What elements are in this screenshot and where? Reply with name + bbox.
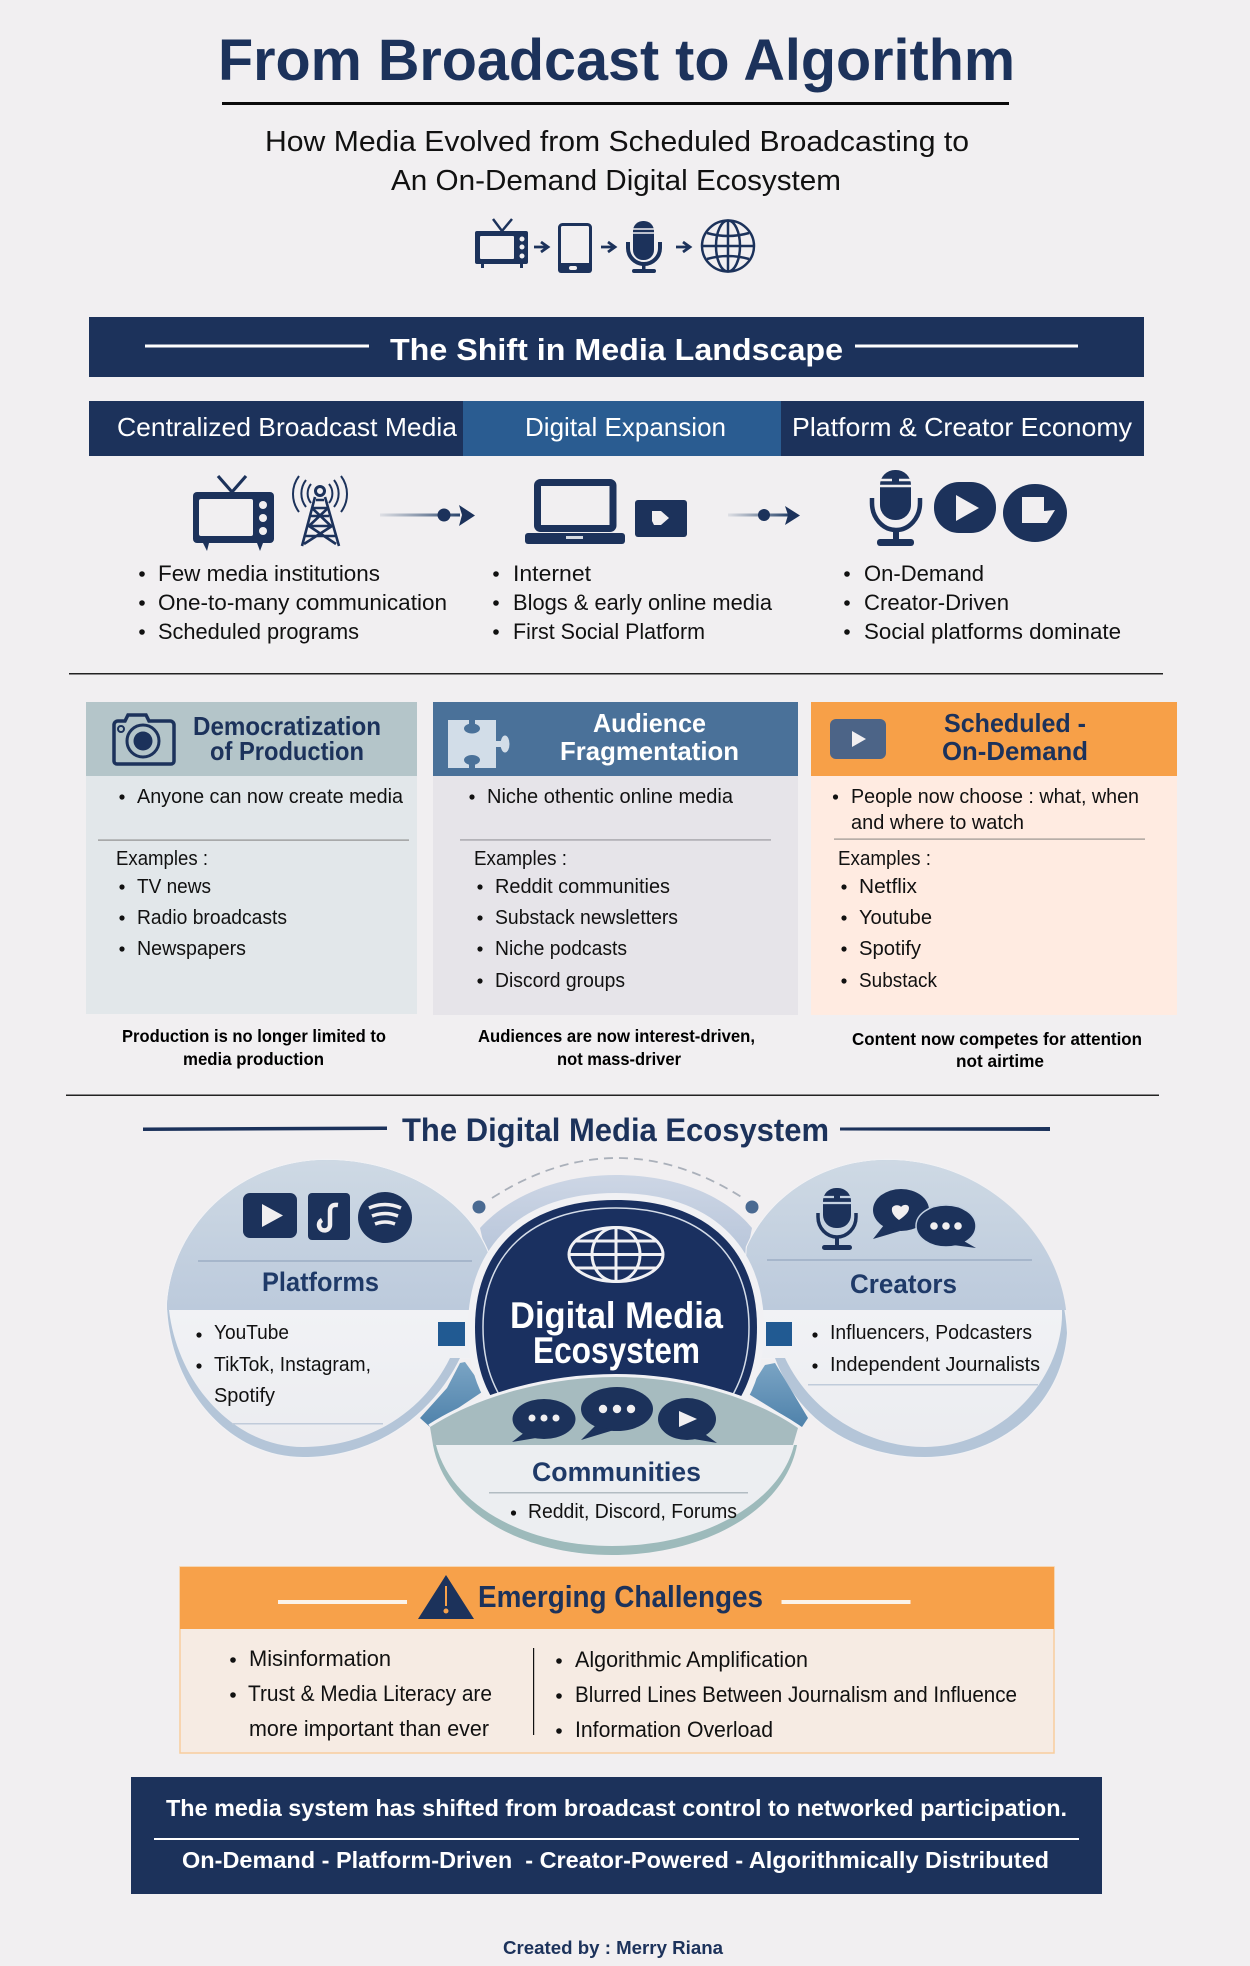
- list: digital expansion: First Social Platform: [513, 619, 705, 644]
- list: left: [230, 1646, 492, 1741]
- list: right: Algorithmic Amplification: [575, 1647, 808, 1672]
- text block: Reddit communities: [495, 875, 670, 898]
- banner: the shift in media landscape: The Shift in Media Landscape: [390, 332, 843, 367]
- icon row: media evolution: [475, 219, 754, 273]
- icon: chat bubbles: [512, 1387, 717, 1443]
- tab: digital expansion: Digital Expansion: [525, 412, 726, 442]
- label: Communities: [532, 1457, 701, 1487]
- credit: Created by : Merry Riana: [503, 1938, 724, 1958]
- label: [510, 1295, 723, 1371]
- label: Creators: [850, 1269, 957, 1299]
- icon: microphone large: [872, 470, 920, 546]
- tab: platform and creator economy: Platform & Creator Economy: [792, 412, 1132, 442]
- panel: creators: [740, 1160, 1067, 1457]
- dashed arc connector: [472, 1158, 758, 1214]
- caption: Audiences are now interest-driven,: [478, 1026, 755, 1046]
- list: digital expansion: Internet: [513, 561, 591, 586]
- label: Platforms: [262, 1267, 379, 1297]
- arrow: [601, 242, 615, 252]
- subtitle: An On-Demand Digital Ecosystem: [391, 165, 841, 197]
- icon: globe: [569, 1227, 663, 1282]
- text block: Youtube: [859, 906, 932, 929]
- banner: conclusion: [131, 1777, 1102, 1894]
- text block: Substack newsletters: [495, 906, 678, 929]
- text block: Newspapers: [137, 937, 246, 960]
- connector: left: [438, 1322, 465, 1346]
- panel: emerging challenges: [180, 1567, 1054, 1753]
- icon: video platform: [243, 1193, 297, 1238]
- text block: Examples :: [474, 847, 567, 870]
- icon: warning triangle: [418, 1575, 474, 1619]
- heading: the digital media ecosystem: The Digital Media Ecosystem: [402, 1112, 829, 1148]
- icon: play tile: [830, 719, 886, 759]
- text block: Netflix: [859, 875, 918, 898]
- list: right: Blurred Lines Between Journalism and Influence: [575, 1682, 1017, 1707]
- icon: microphone: [628, 221, 660, 273]
- list: digital expansion: [493, 561, 773, 644]
- list: centralized broadcast media: One-to-many communication: [158, 590, 447, 615]
- heading: [193, 711, 381, 766]
- list: Spotify: [214, 1384, 276, 1407]
- list: left: Trust & Media Literacy are: [248, 1681, 492, 1706]
- caption: not mass-driver: [557, 1049, 681, 1069]
- subtitle: [265, 126, 969, 197]
- text block: [833, 785, 1145, 992]
- text block: Examples :: [116, 847, 208, 870]
- title: From Broadcast to Algorithm: [218, 28, 1015, 93]
- heading: On-Demand: [942, 736, 1088, 766]
- text block: Spotify: [859, 937, 922, 960]
- heading: the digital media ecosystem: [143, 1112, 1050, 1148]
- heading: Audience: [593, 708, 706, 738]
- icon: play button: [934, 482, 996, 533]
- text block: [98, 785, 409, 960]
- heading: of Production: [210, 736, 364, 766]
- heading: Emerging Challenges: [478, 1579, 763, 1614]
- hub: digital media ecosystem: [475, 1200, 757, 1420]
- list: left: Misinformation: [249, 1646, 391, 1671]
- list: right: Information Overload: [575, 1717, 773, 1742]
- text block: Niche podcasts: [495, 937, 627, 960]
- text block: Discord groups: [495, 969, 625, 992]
- icon: audio platform: [358, 1192, 412, 1243]
- banner: conclusion: The media system has shifted from broadcast control to networked participation.: [166, 1795, 1067, 1821]
- caption: [122, 1026, 386, 1069]
- arrow: broadcast to digital: [380, 505, 475, 526]
- stage lists: [139, 561, 1121, 644]
- icon: puzzle piece: [448, 719, 510, 769]
- ecosystem diagram: [167, 1158, 1067, 1555]
- heading: Scheduled -: [944, 708, 1086, 738]
- back arch: [480, 1175, 752, 1262]
- list: centralized broadcast media: [139, 561, 447, 644]
- right wedge: [747, 1363, 808, 1427]
- tab: centralized broadcast media: Centralized Broadcast Media: [117, 412, 458, 442]
- arrow: [534, 242, 548, 252]
- subtitle: How Media Evolved from Scheduled Broadcasting to: [265, 126, 969, 158]
- icon: short video platform: [308, 1193, 350, 1240]
- list: Independent Journalists: [830, 1353, 1040, 1376]
- icon: content badge: [1003, 484, 1067, 542]
- left wedge: [420, 1362, 485, 1427]
- list: platform and creator economy: Creator-Driven: [864, 590, 1009, 615]
- icon: speech bubbles: [873, 1189, 976, 1248]
- list: [812, 1321, 1040, 1376]
- arrow: digital to platform: [728, 506, 800, 525]
- list: digital expansion: Blogs & early online media: [513, 590, 773, 615]
- panel: communities: [430, 1377, 798, 1555]
- text block: Substack: [859, 969, 938, 992]
- icon: phone: [558, 224, 592, 273]
- caption: [852, 1029, 1142, 1071]
- list: right: [556, 1647, 1017, 1742]
- banner: conclusion: On-Demand - Platform-Driven - Creator-Powered - Algorithmically Distributed: [182, 1847, 1049, 1873]
- list: platform and creator economy: Social platforms dominate: [864, 619, 1121, 644]
- text block: People now choose : what, when: [851, 785, 1139, 808]
- banner: the shift in media landscape: [89, 317, 1144, 377]
- caption: [478, 1026, 755, 1069]
- icon: camera: [114, 715, 174, 764]
- label: Digital Media: [510, 1295, 723, 1336]
- caption: media production: [183, 1049, 324, 1069]
- text block: Anyone can now create media: [137, 785, 404, 808]
- heading: Democratization: [193, 711, 381, 741]
- list: centralized broadcast media: Few media institutions: [158, 561, 380, 586]
- list: platform and creator economy: On-Demand: [864, 561, 984, 586]
- list: TikTok, Instagram,: [214, 1353, 371, 1376]
- text block: TV news: [137, 875, 211, 898]
- icon: globe: [702, 220, 754, 272]
- panel: scheduled to on-demand: [811, 702, 1177, 1071]
- list: centralized broadcast media: Scheduled programs: [158, 619, 359, 644]
- text block: Radio broadcasts: [137, 906, 287, 929]
- heading: [560, 708, 739, 766]
- label: Ecosystem: [533, 1330, 700, 1371]
- text block: and where to watch: [851, 811, 1024, 834]
- text block: [460, 785, 771, 992]
- panel: democratization of production: [86, 702, 417, 1069]
- list: left: more important than ever: [249, 1716, 489, 1741]
- panel: audience fragmentation: [433, 702, 798, 1069]
- text block: Niche othentic online media: [487, 785, 734, 808]
- heading: Fragmentation: [560, 736, 739, 766]
- caption: Content now competes for attention: [852, 1029, 1142, 1049]
- arrow: [676, 242, 690, 252]
- list: YouTube: [214, 1321, 289, 1344]
- text block: Examples :: [838, 847, 931, 870]
- caption: not airtime: [956, 1051, 1044, 1071]
- connector: right: [766, 1322, 792, 1346]
- timeline tabs: [89, 401, 1144, 456]
- list: platform and creator economy: [844, 561, 1121, 644]
- icon: radio tower: [293, 476, 347, 546]
- list: Influencers, Podcasters: [830, 1321, 1032, 1344]
- heading: [942, 708, 1088, 766]
- icon: laptop: [525, 482, 625, 544]
- panel: platforms: [167, 1160, 495, 1457]
- icon: video tile: [635, 500, 687, 537]
- icon: microphone: [818, 1188, 856, 1250]
- list: [196, 1321, 371, 1407]
- caption: Production is no longer limited to: [122, 1026, 386, 1046]
- list: Reddit, Discord, Forums: [528, 1500, 737, 1523]
- icon: television: [475, 219, 528, 268]
- icon: television large: [193, 476, 274, 551]
